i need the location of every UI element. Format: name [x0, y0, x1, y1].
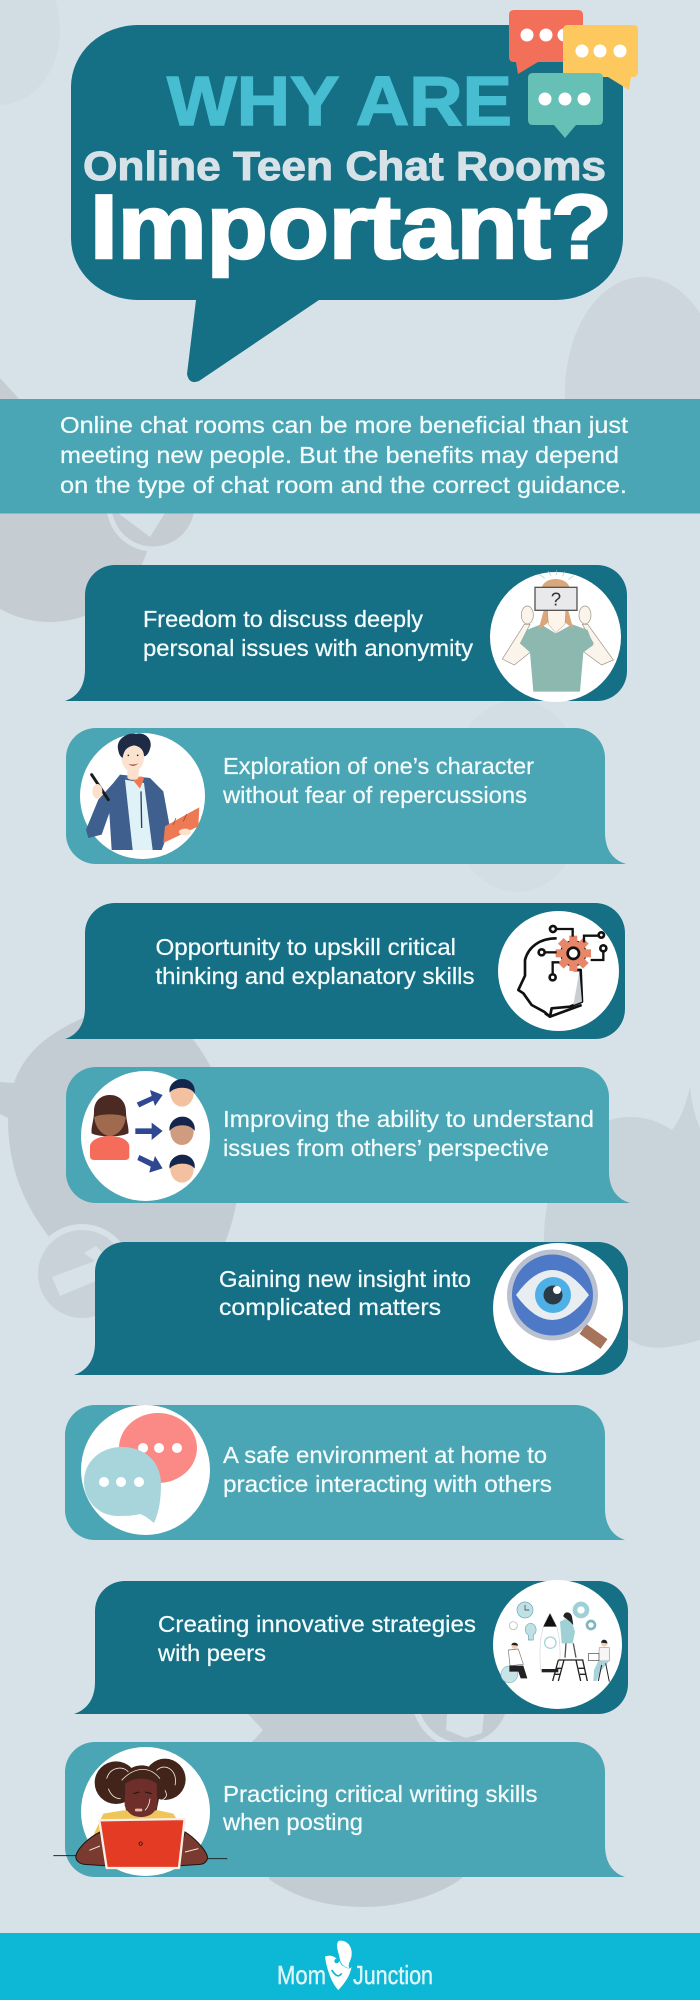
card 7: innovative strategies: [74, 1580, 628, 1714]
text: Gaining new insight into: [219, 1266, 471, 1292]
card 8: critical writing: [53, 1742, 625, 1877]
text: [143, 606, 474, 661]
card 2: exploration: [66, 728, 626, 864]
icon: head with gear: [518, 926, 606, 1017]
heading: why are: WHY ARE: [167, 62, 512, 140]
card 6: safe environment: [65, 1405, 625, 1540]
card 3: opportunity: [65, 903, 625, 1039]
text: Improving the ability to understand: [223, 1106, 594, 1132]
text: Creating innovative strategies: [158, 1611, 476, 1637]
card 1: freedom: [65, 565, 627, 702]
icon: person hiding face behind question mark: [502, 570, 613, 692]
logo: MomJunction: [277, 1941, 433, 1990]
icon: eye in magnifying glass: [510, 1252, 604, 1344]
text: without fear of repercussions: [222, 782, 527, 808]
text: [156, 934, 474, 989]
logo: MomJunction: Mom: [277, 1960, 326, 1990]
logo: MomJunction: Junction: [353, 1960, 433, 1990]
icon: two round chat bubbles: [84, 1413, 197, 1523]
heading: online teen chat rooms: Online Teen Chat Rooms: [83, 143, 606, 189]
intro band: [0, 399, 700, 514]
text: issues from others’ perspective: [223, 1135, 549, 1161]
text: Opportunity to upskill critical: [156, 934, 456, 960]
text: Exploration of one’s character: [223, 753, 534, 779]
title speech bubble: [71, 25, 623, 382]
card 5: gaining insight: [74, 1242, 628, 1375]
text: [222, 753, 534, 808]
text: personal issues with anonymity: [143, 635, 474, 661]
icon: woman and three people with arrows: [90, 1079, 195, 1183]
text: practice interacting with others: [223, 1471, 552, 1497]
text: with peers: [157, 1640, 266, 1666]
footer band: [0, 1933, 700, 2000]
heading: important: Important?: [90, 177, 612, 278]
text: complicated matters: [219, 1294, 441, 1320]
intro text: Online chat rooms can be more beneficial than just: [60, 412, 629, 438]
intro text: meeting new people. But the benefits may depend: [60, 442, 619, 468]
intro text: [60, 412, 629, 498]
text: [223, 1442, 552, 1497]
icon: man with pen and book: [86, 733, 199, 850]
text: A safe environment at home to: [223, 1442, 547, 1468]
icon: girl with red laptop: [53, 1759, 227, 1868]
text: [157, 1611, 476, 1666]
text: [223, 1106, 594, 1161]
intro text: on the type of chat room and the correct guidance.: [60, 472, 627, 498]
icon: three chat bubbles: [509, 10, 638, 138]
text: when posting: [222, 1809, 363, 1835]
text: Practicing critical writing skills: [223, 1781, 538, 1807]
card 4: improving: [66, 1067, 630, 1203]
icon: team building a rocket: [501, 1602, 609, 1683]
icon: mother and baby mark: [325, 1941, 352, 1990]
text: [219, 1266, 471, 1320]
text: [222, 1781, 537, 1835]
icon: person hiding face behind question mark: ?: [551, 589, 561, 610]
text: Freedom to discuss deeply: [143, 606, 424, 632]
text: thinking and explanatory skills: [156, 963, 474, 989]
